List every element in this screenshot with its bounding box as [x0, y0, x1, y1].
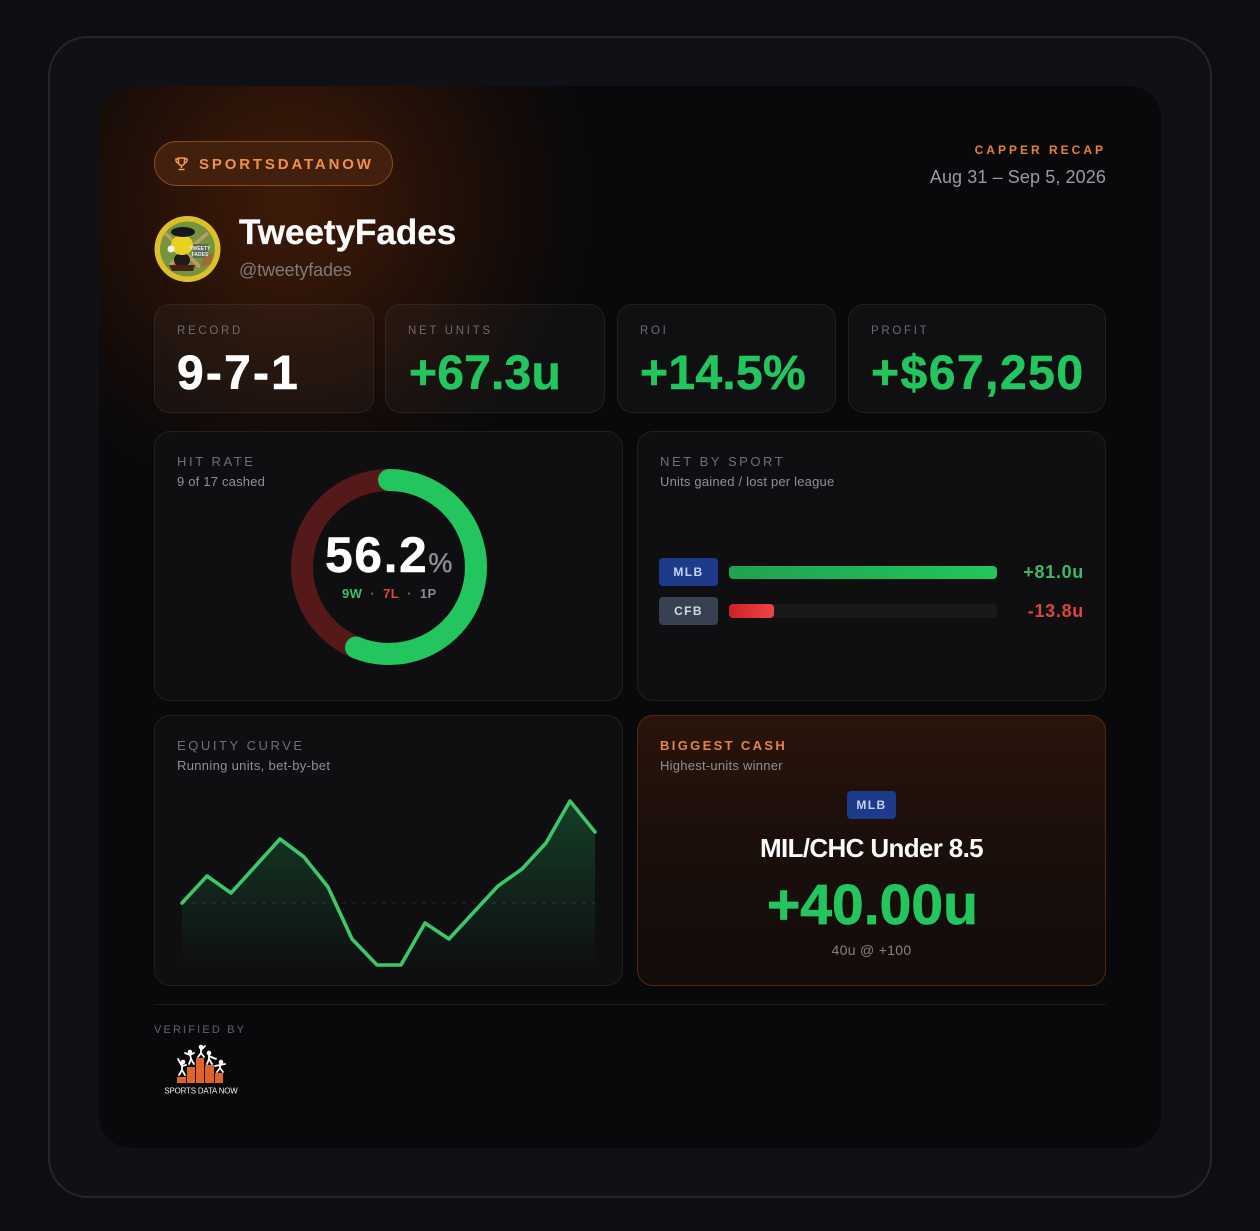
stat: profit — [848, 304, 1106, 413]
stat label: RECORD — [177, 325, 243, 337]
row: CFB — [659, 597, 1084, 625]
stat: record — [154, 304, 374, 413]
heading: HIT RATE — [177, 454, 255, 469]
bar — [729, 566, 997, 579]
panel: equity curve — [154, 715, 623, 986]
subheading: Units gained / lost per league — [660, 474, 834, 489]
league tag: CFB — [674, 604, 703, 618]
row: MLB — [659, 558, 1084, 586]
panel: net by sport — [637, 431, 1106, 701]
stat label: NET UNITS — [408, 325, 493, 337]
logo wordmark: SPORTS DATA NOW — [164, 1086, 238, 1096]
units won: +40.00u — [767, 873, 978, 937]
recap card — [99, 86, 1161, 1148]
stat value: 9-7-1 — [177, 347, 300, 400]
footer label: VERIFIED BY — [154, 1024, 246, 1036]
donut value: 56.2% — [325, 527, 452, 583]
league tag — [847, 791, 896, 819]
icon: trophy — [175, 157, 188, 170]
bet name: MIL/CHC Under 8.5 — [760, 833, 983, 863]
stat value: +$67,250 — [871, 347, 1085, 400]
stat value: +67.3u — [409, 347, 561, 400]
subheading: Highest-units winner — [660, 758, 783, 773]
heading: EQUITY CURVE — [177, 738, 305, 753]
panel: biggest cash — [637, 715, 1106, 986]
icon: avatar — [154, 216, 220, 282]
stat: net units — [385, 304, 605, 413]
header: capper recap and date — [930, 143, 1106, 187]
value: +81.0u — [1023, 562, 1084, 582]
logo: Sports Data Now — [164, 1044, 238, 1096]
stat label: ROI — [640, 325, 669, 337]
league tag — [659, 597, 718, 625]
date range: Aug 31 – Sep 5, 2026 — [930, 167, 1106, 187]
W-L-P record: 9W · 7L · 1P — [342, 586, 437, 601]
heading: NET BY SPORT — [660, 454, 785, 469]
footer: verified by — [154, 1004, 1106, 1100]
bar fill — [729, 604, 774, 618]
bar track — [729, 604, 997, 618]
stat label: PROFIT — [871, 325, 929, 337]
icon: avatar: FADES — [192, 252, 209, 258]
league tag: MLB — [673, 565, 704, 579]
donut chart — [291, 469, 487, 665]
icon: avatar: TWEETY — [190, 246, 211, 252]
league tag: MLB — [856, 798, 887, 812]
badge: SportsDataNow — [154, 141, 393, 186]
badge text: SPORTSDATANOW — [199, 156, 374, 173]
stat: ROI — [617, 304, 836, 413]
capper handle: @tweetyfades — [239, 260, 352, 280]
stake and odds: 40u @ +100 — [832, 942, 911, 958]
value: -13.8u — [1028, 601, 1084, 621]
label: capper recap: CAPPER RECAP — [975, 143, 1106, 157]
stat value: +14.5% — [640, 347, 806, 400]
subheading: 9 of 17 cashed — [177, 474, 265, 489]
capper name: TweetyFades — [239, 213, 456, 252]
subheading: Running units, bet-by-bet — [177, 758, 330, 773]
league tag — [659, 558, 718, 586]
line chart — [180, 799, 597, 967]
heading: BIGGEST CASH — [660, 738, 787, 753]
panel: hit rate — [154, 431, 623, 701]
